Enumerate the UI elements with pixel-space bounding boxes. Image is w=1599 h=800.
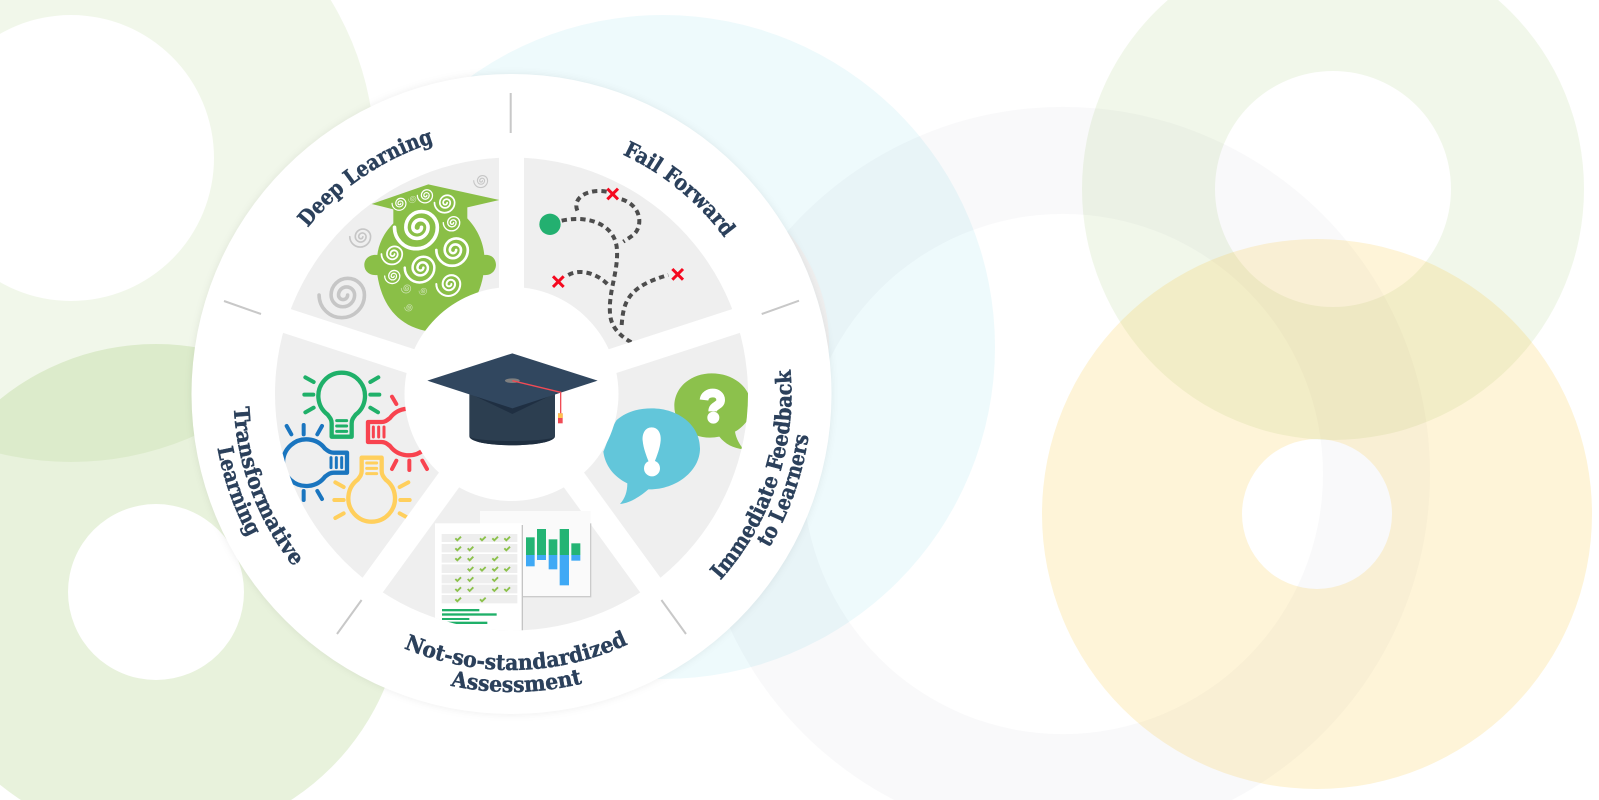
- label: Learning: Learning: [217, 446, 259, 536]
- yellow bulb: [334, 458, 410, 522]
- label: Fail Forward: Fail Forward: [623, 140, 736, 238]
- checklist sheet: [435, 523, 522, 633]
- icon: speech bubbles: [603, 373, 752, 504]
- icon: light bulbs: [283, 373, 432, 522]
- wheel disc: [192, 74, 832, 714]
- icon: graduation cap: [427, 353, 598, 445]
- icon: assessment sheets: [435, 511, 591, 633]
- divider ticks: [224, 93, 799, 634]
- label: Assessment: Assessment: [450, 670, 582, 692]
- wheel: [192, 74, 832, 714]
- label: Immediate Feedback: Immediate Feedback: [708, 369, 792, 580]
- label: Deep Learning: Deep Learning: [296, 132, 432, 228]
- chart sheet: [480, 511, 591, 597]
- label: Transformative: Transformative: [234, 406, 300, 565]
- centre hub: [404, 287, 618, 501]
- green bulb: [304, 373, 379, 437]
- label: Not-so-standardized: Not-so-standardized: [404, 630, 628, 670]
- grey sector band: [275, 158, 748, 630]
- icon: deep learning head: [319, 176, 499, 332]
- label: to Learners: to Learners: [757, 434, 808, 546]
- icon: fail forward paths: [539, 189, 683, 343]
- blue bulb: [283, 425, 347, 500]
- red bulb: [368, 397, 432, 470]
- sector gaps: [275, 145, 748, 595]
